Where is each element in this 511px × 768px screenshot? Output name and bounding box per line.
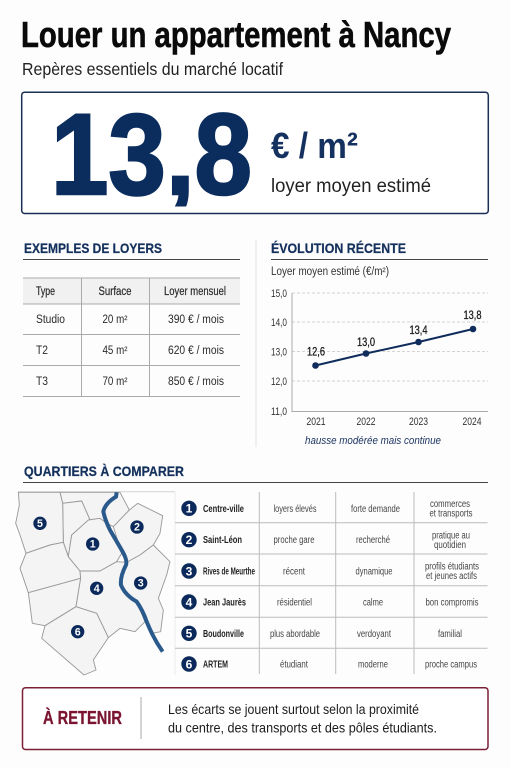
row: Jean Jaurès: Jean Jaurès bbox=[203, 598, 246, 608]
row: ARTEM: ARTEM bbox=[203, 660, 228, 670]
row: Centre-ville: commerces bbox=[430, 499, 470, 510]
line chart: 11,0 bbox=[271, 406, 287, 418]
river bbox=[103, 492, 163, 652]
rent table: Surface bbox=[98, 286, 132, 298]
row: Saint-Léon: pratique au bbox=[432, 530, 470, 541]
row: Rives de Meurthe bbox=[181, 562, 479, 582]
chart note: hausse modérée mais continue bbox=[305, 435, 441, 447]
rent table bbox=[23, 278, 240, 396]
line chart: 2022 bbox=[356, 416, 376, 428]
rent table: 390 € / mois bbox=[168, 314, 224, 326]
callout heading: À RETENIR bbox=[43, 707, 122, 728]
panel: rent examples bbox=[23, 240, 240, 396]
callout text bbox=[168, 701, 437, 736]
callout text: du centre, des transports et des pôles étudiants. bbox=[168, 720, 437, 736]
row: Centre-ville: loyers élevés bbox=[274, 504, 316, 515]
district map bbox=[16, 492, 170, 675]
row: Saint-Léon: Saint-Léon bbox=[203, 535, 242, 546]
key figure caption: loyer moyen estimé bbox=[271, 176, 431, 197]
line chart: 13,0 bbox=[357, 335, 375, 349]
row: ARTEM: 6 bbox=[186, 657, 193, 671]
rent table: T2 bbox=[36, 345, 48, 357]
big number: 13,8 bbox=[51, 91, 252, 219]
row: Jean Jaurès: calme bbox=[363, 598, 383, 608]
row: Centre-ville: forte demande bbox=[351, 504, 400, 515]
row: Boudonville: verdoyant bbox=[357, 629, 391, 640]
row: ARTEM: proche campus bbox=[425, 660, 477, 670]
chart subtitle: Loyer moyen estimé (€/m²) bbox=[271, 266, 389, 278]
row: ARTEM: étudiant bbox=[280, 660, 308, 670]
district map: 2 bbox=[134, 522, 140, 534]
row: Saint-Léon: quotidien bbox=[434, 540, 466, 551]
rent table: 20 m² bbox=[102, 314, 128, 326]
row: Boudonville: Boudonville bbox=[203, 629, 244, 640]
row: Saint-Léon: recherché bbox=[356, 535, 390, 546]
rent table: Studio bbox=[36, 314, 65, 326]
line chart: 12,0 bbox=[271, 376, 287, 388]
row: Rives de Meurthe: dynamique bbox=[356, 566, 393, 578]
line chart: 14,0 bbox=[271, 317, 287, 329]
panel: recent trend bbox=[271, 240, 488, 447]
row: Jean Jaurès: résidentiel bbox=[277, 598, 312, 608]
unit: € / m² bbox=[271, 125, 358, 166]
callout: key takeaway bbox=[22, 688, 488, 750]
district map: 3 bbox=[138, 578, 144, 590]
rent table: 620 € / mois bbox=[168, 345, 224, 357]
rent table: Loyer mensuel bbox=[164, 286, 226, 298]
row: Rives de Meurthe: et jeunes actifs bbox=[426, 571, 477, 582]
district map: 6 bbox=[75, 626, 81, 638]
line chart: 2021 bbox=[306, 416, 326, 428]
rent table: 45 m² bbox=[102, 345, 128, 357]
row: Saint-Léon: proche gare bbox=[274, 535, 315, 546]
panel: neighbourhoods bbox=[16, 463, 488, 675]
district map: 4 bbox=[94, 583, 100, 595]
subtitle: Repères essentiels du marché locatif bbox=[22, 59, 283, 79]
line chart: 13,4 bbox=[410, 323, 428, 337]
row: Rives de Meurthe: récent bbox=[283, 566, 305, 578]
district map: 1 bbox=[90, 539, 96, 551]
rent table: 70 m² bbox=[102, 376, 128, 388]
rent table: Type bbox=[36, 286, 55, 298]
rent table: 850 € / mois bbox=[168, 376, 224, 388]
heading: neighbourhoods: QUARTIERS À COMPARER bbox=[24, 463, 184, 479]
row: Rives de Meurthe: Rives de Meurthe bbox=[203, 566, 255, 578]
line chart: 2024 bbox=[462, 416, 482, 428]
line chart: 15,0 bbox=[271, 288, 287, 300]
district map: 5 bbox=[37, 518, 43, 530]
callout text: Les écarts se jouent surtout selon la proximité bbox=[168, 701, 419, 717]
row: Centre-ville bbox=[181, 499, 473, 520]
row: Rives de Meurthe: profils étudiants bbox=[425, 562, 479, 572]
row: Saint-Léon: 2 bbox=[186, 533, 193, 547]
heading: recent trend: ÉVOLUTION RÉCENTE bbox=[271, 240, 406, 256]
line chart: 12,6 bbox=[307, 344, 325, 358]
line chart: 2023 bbox=[409, 416, 428, 428]
row: Rives de Meurthe: 3 bbox=[186, 564, 193, 578]
rent table: T3 bbox=[36, 376, 48, 388]
row: Centre-ville: Centre-ville bbox=[203, 504, 244, 515]
row: Saint-Léon bbox=[181, 530, 470, 551]
row: Boudonville: familial bbox=[438, 629, 462, 640]
row: Jean Jaurès bbox=[181, 594, 479, 610]
line chart bbox=[271, 288, 488, 428]
panel: key figure bbox=[22, 91, 488, 219]
row: Centre-ville: et transports bbox=[430, 508, 472, 520]
row: Boudonville: plus abordable bbox=[270, 629, 320, 640]
row: ARTEM bbox=[181, 656, 477, 672]
row: Jean Jaurès: 4 bbox=[186, 595, 193, 609]
row: Centre-ville: 1 bbox=[186, 502, 193, 516]
line chart: 13,0 bbox=[271, 346, 287, 358]
row: Boudonville bbox=[181, 626, 462, 641]
heading: rent examples: EXEMPLES DE LOYERS bbox=[24, 240, 162, 256]
line chart: 13,8 bbox=[464, 308, 482, 322]
comparison table bbox=[175, 492, 488, 674]
row: Jean Jaurès: bon compromis bbox=[426, 598, 478, 608]
row: ARTEM: moderne bbox=[358, 660, 388, 670]
row: Boudonville: 5 bbox=[186, 627, 193, 641]
